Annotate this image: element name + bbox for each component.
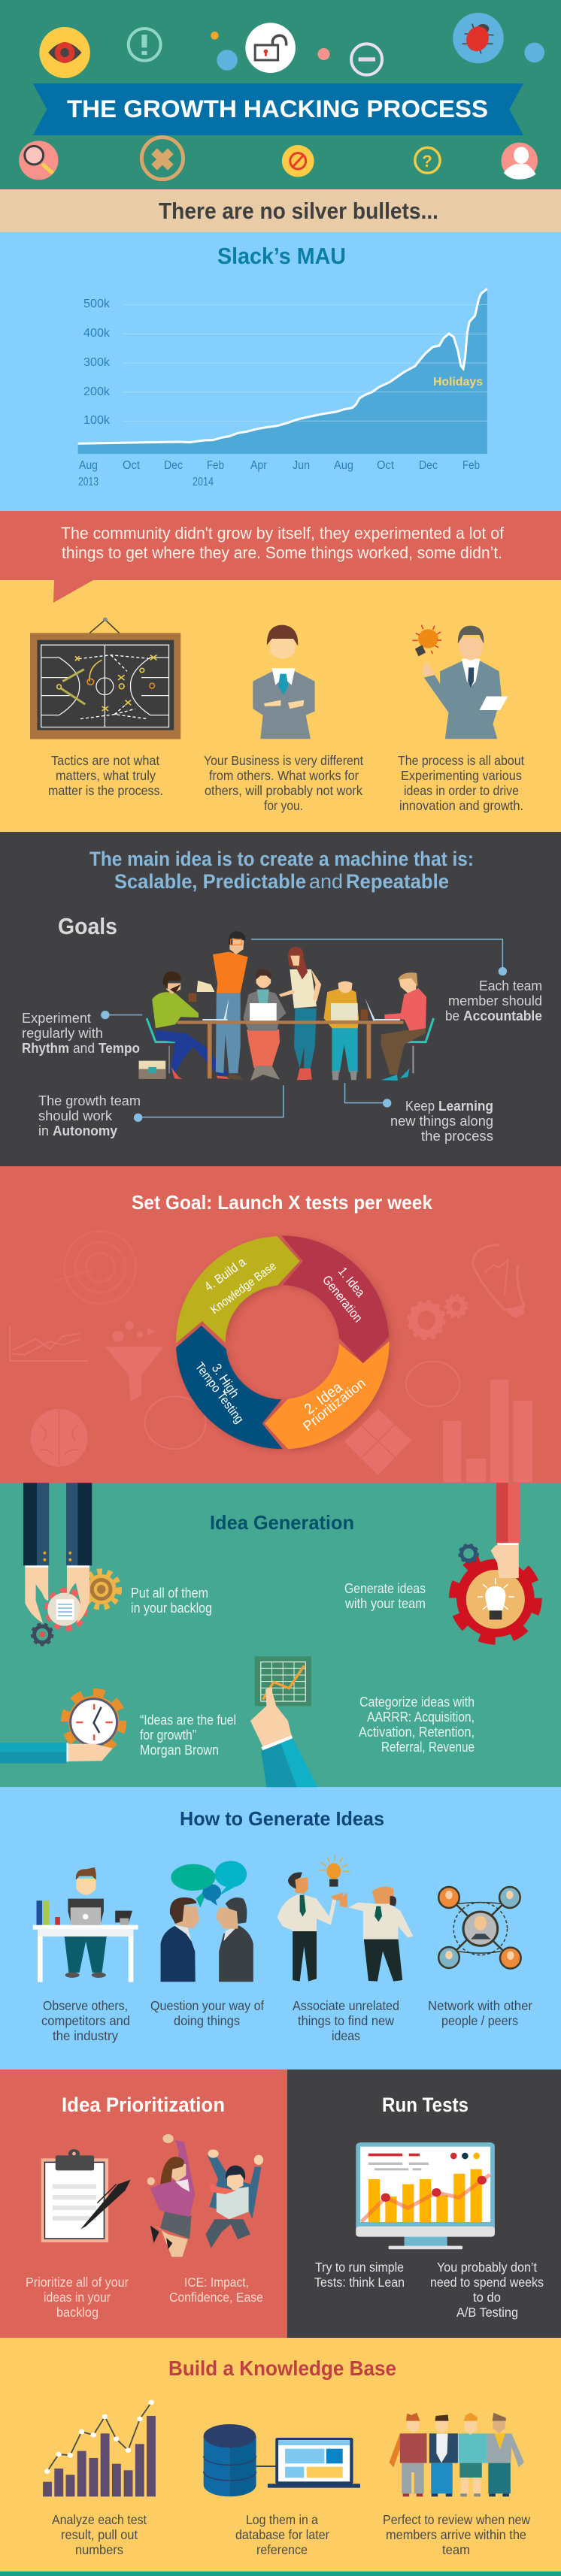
person: green sweater: [147, 972, 232, 1079]
panel: three illustrations: [30, 618, 508, 739]
text: associate: Associate unrelated: [293, 1998, 399, 2013]
text: AARRR: Categorize ideas with: [359, 1694, 475, 1710]
person: seated woman: [243, 969, 287, 1081]
faint swirls: [145, 1362, 459, 1449]
heading: Goals: Goals: [58, 913, 117, 939]
icon: man with crossed arms: [253, 625, 315, 739]
icon: cross: [141, 138, 183, 180]
icon: tactics blackboard: [30, 618, 180, 739]
text: associate: things to find new: [298, 2013, 394, 2028]
icon glyph: question mark: ?: [422, 152, 432, 171]
x axis labels: Feb: [462, 459, 480, 472]
text: accountable: Accountable: [463, 1008, 542, 1023]
text: review caption: team: [442, 2542, 470, 2557]
segment label 2: Prioritization: [300, 1375, 368, 1434]
icon: clock on gear: [0, 1695, 120, 1764]
heading: main idea: Scalable, Predictable: [114, 870, 306, 893]
text: A/B testing caption: You probably don’t: [437, 2260, 537, 2275]
text: process caption: innovation and growth.: [399, 798, 523, 813]
x axis labels: [78, 459, 480, 488]
segment label 3: Tempo Testing: [193, 1360, 246, 1426]
text: rhythm and tempo: Rhythm: [22, 1040, 69, 1056]
icon: ladybug: [453, 13, 504, 63]
segment label 4: 4. Build a: [202, 1255, 249, 1294]
person: standing woman: [279, 947, 321, 1080]
text: learning: the process: [421, 1128, 493, 1144]
icon: hands holding backlog: [23, 1483, 118, 1644]
panel: knowledge base illustrations: [43, 2400, 524, 2496]
text: review caption: members arrive within the: [386, 2527, 526, 2542]
panel: team illustration: [101, 931, 507, 1122]
faint gears: [410, 1296, 466, 1338]
text: AARRR: AARRR: Acquisition,: [367, 1709, 475, 1725]
text: learning: [390, 1098, 493, 1144]
icon: minus: [351, 44, 382, 75]
text: accountable: [445, 978, 542, 1023]
panel: prioritization and tests illustrations: [41, 2134, 495, 2257]
faint bulb: [473, 1245, 524, 1318]
icon: two men and lightbulb: [277, 1855, 413, 1982]
text: AARRR: Referral, Revenue: [381, 1739, 475, 1755]
text: quote: Morgan Brown: [140, 1742, 219, 1758]
text: tactics caption: matters, what truly: [56, 768, 156, 783]
text: A/B testing caption: [430, 2260, 544, 2320]
text: backlog: [131, 1585, 212, 1616]
text: prioritize caption: ideas in your: [44, 2290, 111, 2305]
heading: main idea: and: [309, 870, 343, 893]
icon: magnifier: [19, 141, 59, 180]
text: rhythm and tempo: [22, 1010, 140, 1056]
text: AARRR: Activation, Retention,: [359, 1724, 475, 1740]
text: A/B testing caption: need to spend weeks: [430, 2275, 544, 2290]
segment label 1: 1. Idea: [335, 1265, 368, 1300]
text: analyze caption: [52, 2512, 147, 2557]
icon: person: [501, 143, 538, 180]
text: tactics caption: Tactics are not what: [51, 753, 159, 768]
text: generate ideas: Generate ideas: [344, 1580, 426, 1596]
icon: no sign: [282, 145, 314, 177]
text: ICE caption: Confidence, Ease: [169, 2290, 263, 2305]
speech bubble tail: [53, 580, 93, 603]
text: log caption: reference: [256, 2542, 308, 2557]
heading: set goal: Set Goal: Launch X tests per week: [132, 1191, 432, 1214]
icon: hand with red gear and bulb: [456, 1483, 535, 1637]
y axis labels: 200k: [83, 385, 111, 398]
text: accountable: member should: [448, 993, 542, 1008]
text: tactics caption: [48, 753, 163, 798]
title: THE GROWTH HACKING PROCESS: [67, 95, 488, 122]
x axis labels: Aug: [334, 459, 353, 472]
text: business caption: Your Business is very different: [204, 753, 363, 768]
text: ICE caption: [169, 2275, 263, 2305]
text: business caption: from others. What works for: [209, 768, 359, 783]
x axis labels: Dec: [419, 459, 438, 472]
text: process caption: ideas in order to drive: [404, 783, 519, 798]
text: community statement: The community didn't grow by itself, they experimented a lot of: [61, 524, 505, 543]
text: ICE caption: ICE: Impact,: [184, 2275, 249, 2290]
text: observe: [41, 1998, 130, 2043]
text: associate: [293, 1998, 399, 2043]
x axis labels: Dec: [164, 459, 183, 472]
decorative dots left: [211, 32, 544, 71]
connector lines: [105, 939, 502, 1117]
icon: jumping man: [206, 2149, 263, 2248]
text: autonomy: in: [38, 1123, 49, 1138]
text: simple tests caption: [314, 2260, 405, 2290]
panel: header icons: [19, 13, 544, 180]
text: autonomy: Autonomy: [53, 1123, 118, 1138]
y axis labels: 400k: [83, 327, 111, 340]
icon: open lock: [245, 23, 296, 73]
text: business caption: others, will probably not work: [205, 783, 362, 798]
text: AARRR: [359, 1694, 475, 1755]
icon: man at desk: [33, 1867, 138, 1982]
x axis labels: 2013: [78, 476, 99, 488]
icon: two men talking: [161, 1861, 253, 1982]
text: accountable: be: [445, 1008, 459, 1023]
y axis labels: 100k: [83, 414, 111, 427]
icon: finger pointing at chart: [250, 1656, 317, 1787]
text: community statement: [61, 524, 505, 562]
faint target: [53, 1231, 136, 1304]
x axis labels: Oct: [377, 459, 395, 472]
area chart: Slack MAU: [78, 289, 487, 488]
text: process caption: The process is all about: [398, 753, 524, 768]
text: log caption: [235, 2512, 329, 2557]
text: network: Network with other: [428, 1998, 532, 2013]
text: review caption: Perfect to review when new: [383, 2512, 530, 2527]
text: generate ideas: with your team: [344, 1595, 426, 1611]
y axis labels: 300k: [83, 356, 111, 369]
icon: bar and line chart: [43, 2400, 156, 2496]
annotation: Holidays: Holidays: [433, 376, 483, 389]
text: quote: for growth”: [140, 1727, 196, 1743]
person: yellow jacket: [324, 981, 368, 1080]
heading: main idea: The main idea is to create a machine that is:: [89, 848, 474, 870]
text: backlog: in your backlog: [131, 1600, 212, 1616]
text: accountable: Each team: [479, 978, 542, 993]
text: prioritize caption: [26, 2275, 129, 2320]
text: prioritize caption: backlog: [56, 2305, 99, 2320]
faint puzzle: [344, 1409, 411, 1475]
icon: four team members: [390, 2413, 524, 2496]
text: A/B testing caption: to do: [473, 2290, 501, 2305]
text: prioritize caption: Prioritize all of your: [26, 2275, 129, 2290]
person: standing man orange: [197, 931, 248, 1080]
faint line chart: [10, 1326, 88, 1361]
table: [177, 1020, 404, 1078]
text: generate ideas: [344, 1580, 426, 1611]
faint brain: [30, 1409, 88, 1467]
text: learning: new things along: [390, 1113, 493, 1129]
text: log caption: Log them in a: [246, 2512, 318, 2527]
heading: idea prioritization: Idea Prioritization: [62, 2094, 225, 2116]
text: observe: competitors and: [41, 2013, 130, 2028]
text: network: [428, 1998, 532, 2028]
person: red sweater with headset: [202, 972, 434, 1081]
text: question: [150, 1998, 264, 2028]
text: quote: “Ideas are the fuel: [140, 1712, 236, 1728]
text: analyze caption: result, pull out: [61, 2527, 138, 2542]
diagram: cycle ring: [176, 1235, 390, 1449]
text: autonomy: The growth team: [38, 1093, 141, 1108]
x axis labels: Apr: [250, 459, 268, 472]
text: analyze caption: numbers: [75, 2542, 123, 2557]
x axis labels: 2014: [193, 476, 214, 488]
icon: clipboard and pen: [41, 2149, 131, 2242]
text: simple tests caption: Try to run simple: [315, 2260, 404, 2275]
text: review caption: [383, 2512, 530, 2557]
icon: question mark ring: [415, 147, 440, 173]
text: log caption: database for later: [235, 2527, 329, 2542]
text: business caption: [204, 753, 363, 813]
panel: idea generation illustrations: [0, 1483, 535, 1787]
text: rhythm and tempo: regularly with: [22, 1025, 103, 1041]
text: autonomy: should work: [38, 1108, 113, 1123]
x axis labels: Jun: [293, 459, 310, 472]
bag: [139, 1061, 165, 1079]
icon: jumping woman: [147, 2134, 195, 2257]
y axis labels: [83, 298, 111, 427]
text: rhythm and tempo: and: [73, 1040, 95, 1056]
faint funnel: [105, 1321, 164, 1401]
text: rhythm and tempo: Tempo: [99, 1040, 140, 1056]
heading: main idea: [89, 848, 474, 893]
text: process caption: [398, 753, 524, 813]
icon: exclamation: [129, 29, 161, 61]
segment label 1: Generation: [320, 1273, 365, 1325]
text: network: people / peers: [441, 2013, 518, 2028]
text: tactics caption: matter is the process.: [48, 783, 163, 798]
segment label 2: 2. Idea: [302, 1379, 346, 1418]
icon: eye: [39, 27, 90, 78]
text: question: Question your way of: [150, 1998, 264, 2013]
heading: idea generation: Idea Generation: [210, 1511, 354, 1534]
heading: run tests: Run Tests: [382, 2094, 469, 2116]
y axis labels: 500k: [83, 298, 111, 310]
x axis labels: Aug: [79, 459, 98, 472]
text: observe: the industry: [53, 2028, 118, 2043]
text: learning: Keep: [405, 1098, 435, 1114]
segment label 3: 3. High: [209, 1361, 242, 1401]
heading: build a knowledge base: Build a Knowledge Base: [168, 2357, 396, 2380]
panel: how to generate illustrations: [33, 1855, 521, 1982]
text: associate: ideas: [332, 2028, 360, 2043]
panel: faint background icons: [10, 1231, 532, 1483]
text: autonomy: [38, 1093, 141, 1138]
title ribbon: [33, 83, 523, 135]
icon: database and laptop: [204, 2424, 360, 2496]
ring segments: [176, 1235, 390, 1449]
text: quote: [140, 1712, 236, 1758]
text: A/B testing caption: A/B Testing: [456, 2305, 518, 2320]
text: question: doing things: [174, 2013, 240, 2028]
segment label 4: Knowledge Base: [208, 1259, 279, 1317]
text: backlog: Put all of them: [131, 1585, 208, 1601]
heading: main idea: Repeatable: [346, 870, 449, 893]
icon: network of people: [438, 1887, 521, 1969]
text: simple tests caption: Tests: think Lean: [314, 2275, 405, 2290]
icon: monitor chart: [356, 2142, 495, 2249]
text: business caption: for you.: [264, 798, 303, 813]
x axis labels: Feb: [207, 459, 224, 472]
faint bar chart: [443, 1380, 532, 1483]
text: community statement: things to get where they are. Some things worked, some didn’t.: [62, 543, 502, 562]
heading: Slack's MAU: Slack’s MAU: [217, 243, 346, 269]
text: rhythm and tempo: Experiment: [22, 1010, 91, 1026]
icon: man with light bulb: [412, 625, 508, 739]
text: analyze caption: Analyze each test: [52, 2512, 147, 2527]
text: observe: Observe others,: [43, 1998, 128, 2013]
connector dots: [101, 967, 507, 1122]
text: process caption: Experimenting various: [401, 768, 522, 783]
heading: how to generate ideas: How to Generate Ideas: [180, 1807, 384, 1830]
subtitle: There are no silver bullets...: [159, 198, 438, 224]
x axis labels: Oct: [123, 459, 141, 472]
chart plot: [78, 289, 487, 454]
text: learning: Learning: [438, 1098, 493, 1114]
